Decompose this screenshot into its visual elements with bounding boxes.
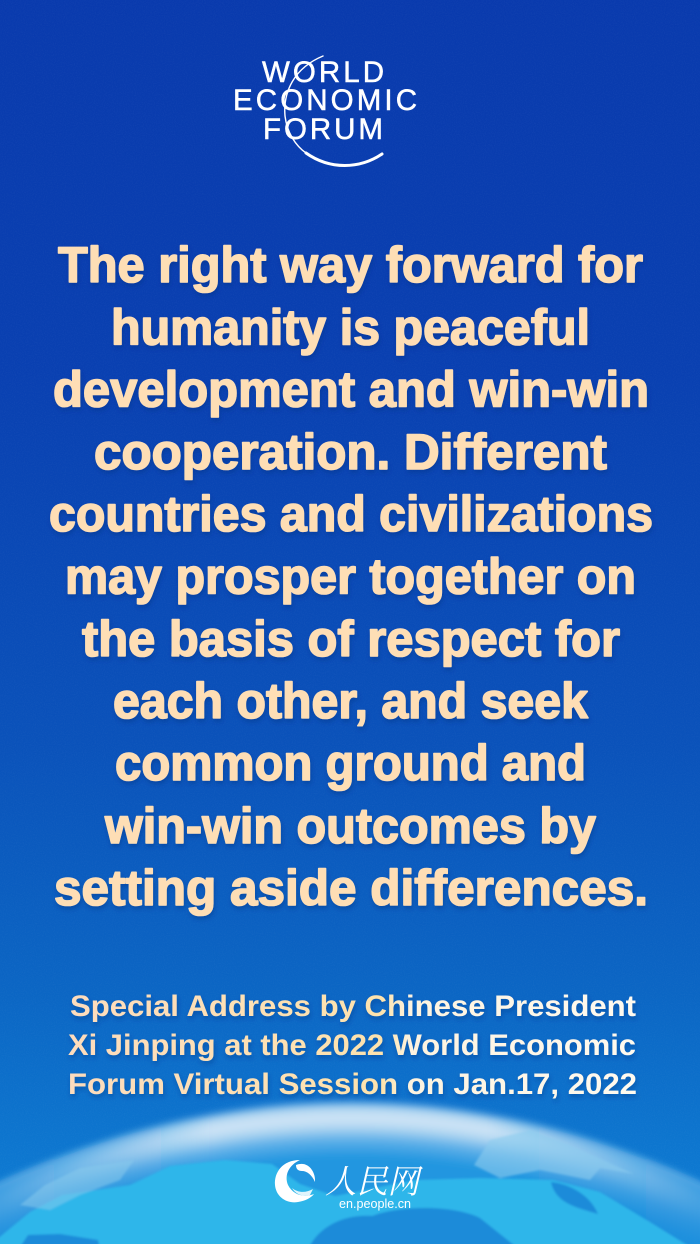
main quote: cooperation. Different: [94, 424, 607, 480]
globe: [0, 1102, 700, 1244]
main quote: humanity is peaceful: [111, 300, 590, 356]
main quote: setting aside differences.: [54, 860, 648, 916]
main quote: each other, and seek: [113, 673, 588, 729]
source attribution: Xi Jinping at the 2022 World Economic: [68, 1029, 636, 1062]
main quote: countries and civilizations: [49, 486, 653, 542]
main quote: The right way forward for: [58, 237, 643, 293]
logo Chinese name: 人民网: [325, 1156, 424, 1203]
World Economic Forum logo: [233, 56, 417, 166]
logo URL: en.people.cn: [339, 1197, 411, 1211]
logo wordmark: ECONOMIC: [233, 84, 417, 117]
logo arc: [285, 56, 382, 166]
source attribution: Special Address by Chinese President: [70, 990, 636, 1023]
logo wordmark: FORUM: [263, 113, 383, 146]
logo wordmark: [233, 56, 417, 146]
main quote: the basis of respect for: [82, 611, 620, 667]
main quote: win-win outcomes by: [104, 798, 596, 854]
main quote: common ground and: [115, 735, 586, 791]
main quote: may prosper together on: [65, 548, 636, 604]
source attribution: Forum Virtual Session on Jan.17, 2022: [68, 1068, 637, 1101]
logo emblem: [275, 1160, 315, 1202]
main quote: development and win-win: [53, 362, 649, 418]
source attribution: [68, 990, 637, 1101]
continents: [0, 1130, 695, 1244]
logo wordmark: WORLD: [262, 56, 384, 89]
People's Daily Online logo: [275, 1156, 424, 1211]
main quote: [49, 237, 653, 916]
